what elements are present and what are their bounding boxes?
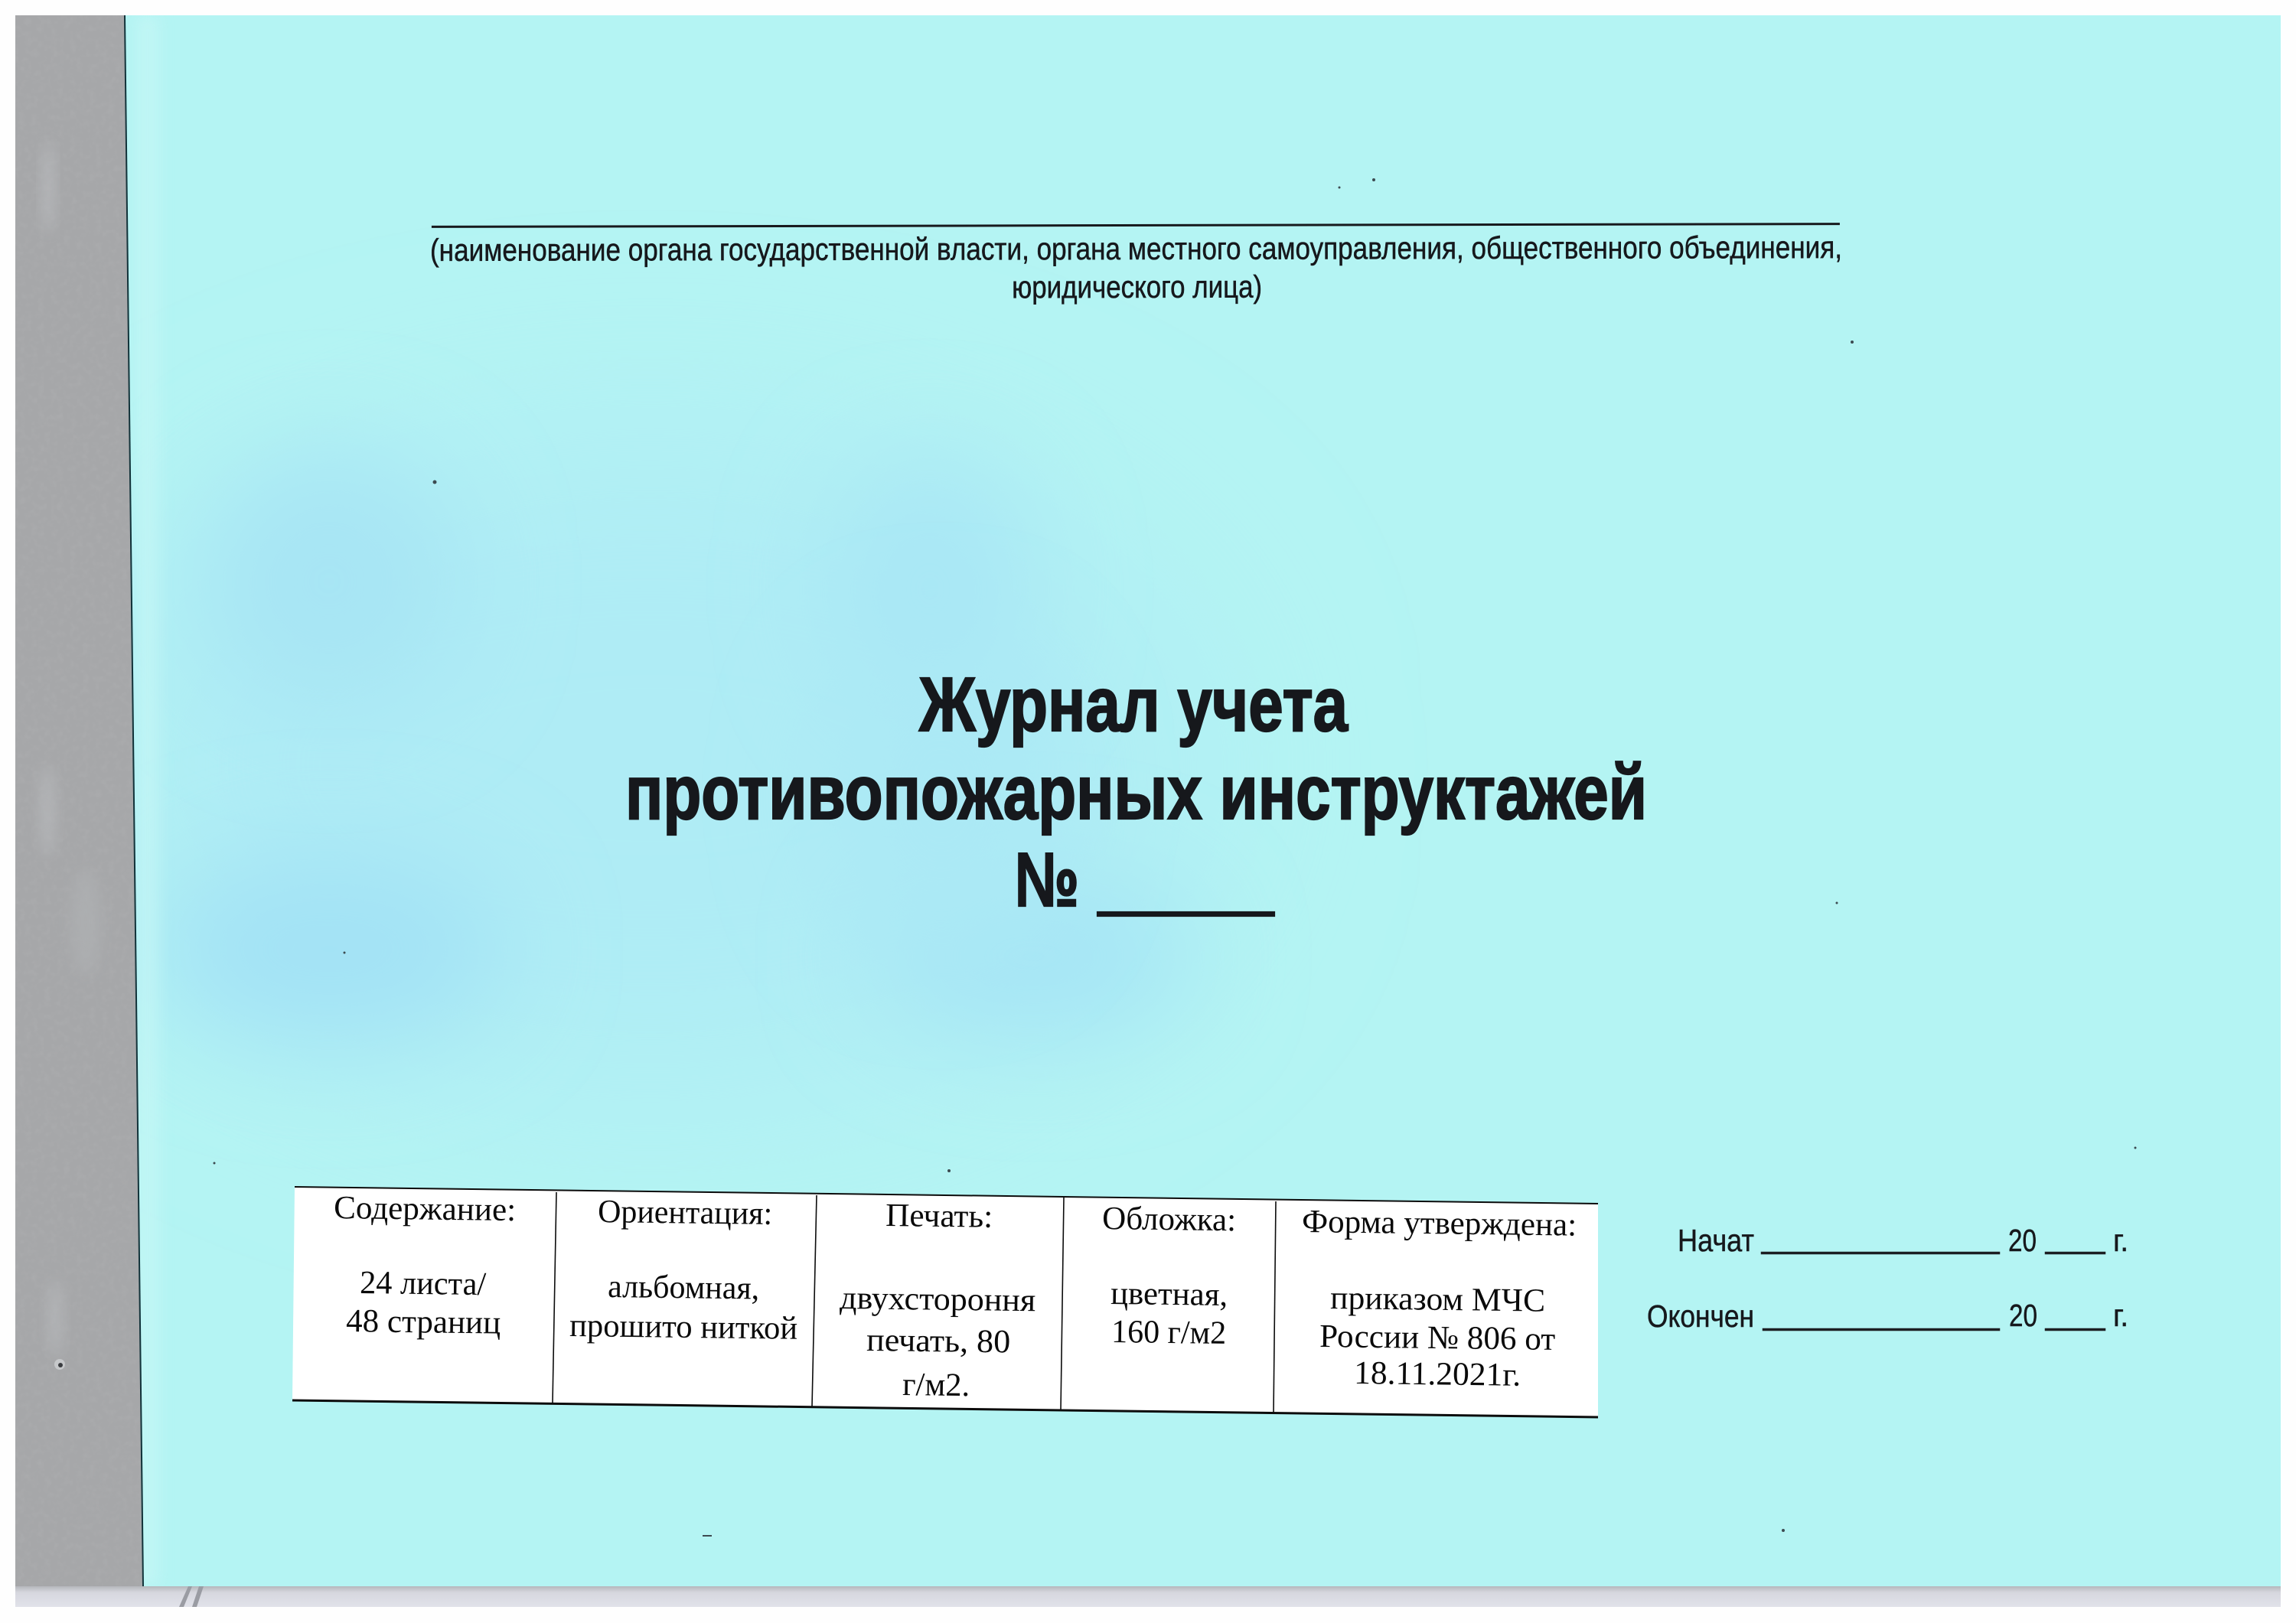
cell: cover: Обложка:: [1102, 1201, 1236, 1238]
spine edge line: [125, 15, 143, 1586]
info table: [292, 1187, 1598, 1417]
organisation caption: (наименование органа государственной власти, органа местного самоуправления, общественного объединения,: [430, 230, 1842, 268]
title: №: [1015, 837, 1079, 923]
cell: printing: [840, 1198, 1035, 1403]
date finished: 20: [2009, 1298, 2037, 1333]
cell: approved form: 18.11.2021г.: [1354, 1355, 1521, 1393]
number blank line: [1097, 912, 1274, 916]
cell: approved form: [1302, 1204, 1577, 1393]
start and end dates: [1647, 1223, 2128, 1334]
cell: approved form: Форма утверждена:: [1302, 1204, 1577, 1243]
date finished: г.: [2113, 1298, 2128, 1333]
date started: [1678, 1223, 2128, 1258]
ink blotches: [165, 455, 1166, 1061]
title: Журнал учета: [918, 662, 1349, 748]
table rules: [292, 1187, 1598, 1417]
cell: orientation: [569, 1194, 797, 1347]
cell: approved form: России № 806 от: [1319, 1318, 1556, 1357]
cell: cover: 160 г/м2: [1111, 1314, 1226, 1351]
cell: contents: Содержание:: [334, 1190, 516, 1228]
date started: 20: [2008, 1223, 2037, 1258]
organisation caption: [430, 230, 1842, 306]
signature rule: [432, 223, 1840, 228]
cell: printing: печать, 80: [866, 1322, 1010, 1360]
cell: contents: [334, 1190, 516, 1341]
title: [625, 662, 1647, 923]
cell: contents: 24 листа/: [360, 1265, 487, 1302]
organisation caption: юридического лица): [1012, 269, 1262, 305]
cell: cover: цветная,: [1110, 1276, 1228, 1313]
date started: г.: [2113, 1223, 2128, 1258]
date finished: Окончен: [1647, 1299, 1754, 1334]
cell: contents: 48 страниц: [346, 1303, 501, 1341]
cell: cover: [1102, 1201, 1236, 1351]
grey binding spine: [15, 15, 144, 1586]
title: противопожарных инструктажей: [625, 750, 1647, 836]
organisation name block: [430, 223, 1842, 306]
cell: approved form: приказом МЧС: [1330, 1280, 1545, 1319]
cell: printing: Печать:: [885, 1198, 993, 1235]
cell: printing: г/м2.: [902, 1367, 970, 1403]
date started: Начат: [1678, 1223, 1754, 1258]
date finished: [1647, 1298, 2128, 1334]
cell: orientation: прошито ниткой: [569, 1308, 797, 1347]
cell: orientation: Ориентация:: [598, 1194, 772, 1232]
white label: [292, 1187, 1598, 1417]
cell: printing: двухстороння: [840, 1280, 1035, 1318]
dust specks: [213, 178, 2137, 1537]
cell: orientation: альбомная,: [608, 1269, 759, 1307]
bottom page edge strip: [15, 1586, 2281, 1607]
